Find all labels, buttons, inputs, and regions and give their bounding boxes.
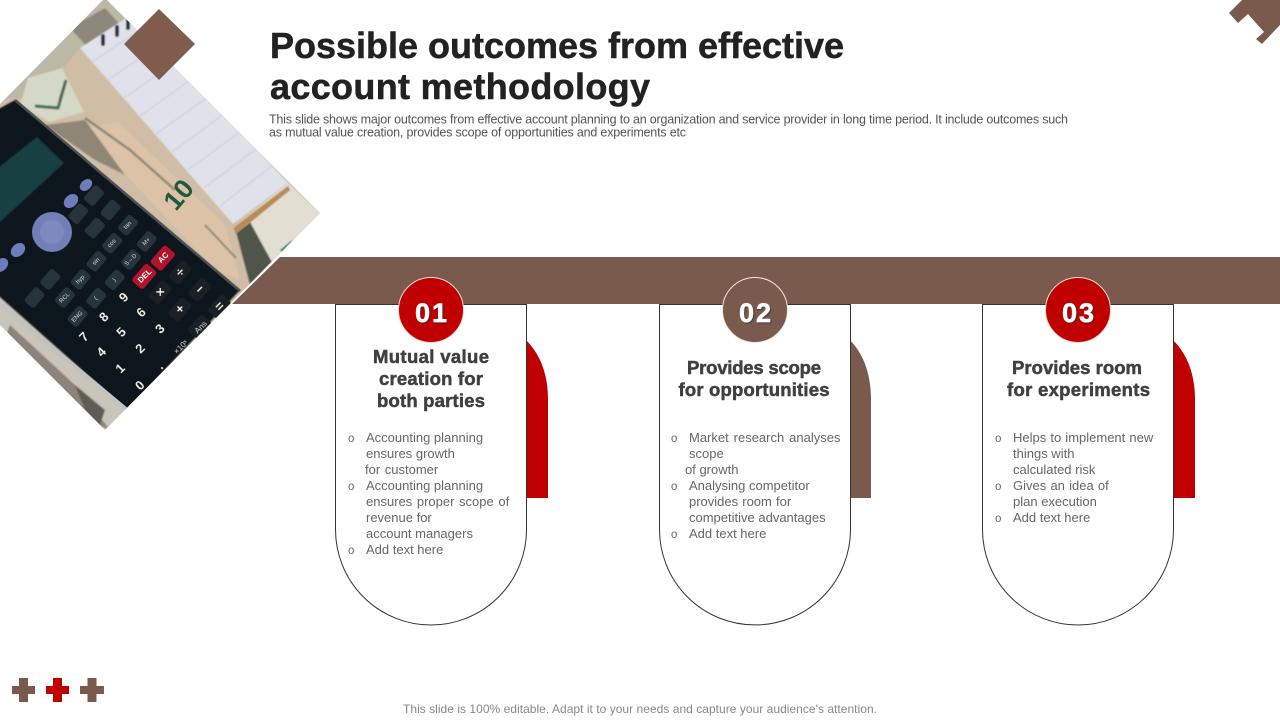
card 3 bullet list: o [995, 481, 1001, 493]
card 2 bullet list: competitive advantages [689, 510, 826, 525]
card 2 body [660, 304, 850, 625]
calculator body [0, 100, 240, 410]
card 1 bullet list: Accounting planning [366, 478, 483, 493]
calculator keys: 9 [116, 289, 131, 305]
card 3 bullet list: things with [1013, 446, 1074, 461]
calculator keys: × [152, 283, 168, 300]
calculator keys: 7 [76, 329, 92, 345]
calculator keys: hyp [75, 274, 87, 286]
card 3 body [982, 304, 1174, 625]
photo: calculator, notepad and banknotes [0, 0, 330, 440]
calculator keys: 3 [152, 321, 168, 336]
calculator keys: ×10ˣ [172, 338, 190, 356]
corner icon [1229, 0, 1280, 44]
banknote denomination: 10 [158, 174, 200, 216]
card 1 bullet list: o [348, 433, 354, 445]
card 2 back tab [850, 340, 871, 498]
calculator keys: 6 [133, 304, 149, 320]
card 1 bullet list: account managers [366, 526, 473, 541]
card 3 bullet list: Gives an idea of [1013, 478, 1109, 493]
card 2 bullet list: Analysing competitor [689, 478, 810, 493]
card 1 bullet list: Accounting planning [366, 430, 483, 445]
card 3 back tab [1173, 340, 1195, 498]
calculator keys: 8 [96, 309, 112, 325]
calculator keys: ) [112, 278, 118, 283]
card 3 number badge: 03 [1062, 298, 1096, 328]
card 2 bullet list: Market research analyses [689, 430, 841, 445]
card 2 number badge: 02 [739, 298, 773, 328]
calculator keys: = [211, 298, 228, 314]
calculator keys: 5 [113, 324, 129, 340]
card 3 bullet list: Add text here [1013, 510, 1090, 525]
calculator keys: sin [92, 257, 101, 267]
calculator keys: 2 [132, 341, 148, 356]
card 3 bullet list: o [995, 513, 1001, 525]
banner stripe [232, 257, 1280, 304]
card 1 bullet list: Add text here [366, 542, 443, 557]
card 1 number badge [398, 278, 464, 342]
calculator keys: + [172, 301, 188, 317]
calculator keys: Ans [193, 319, 209, 335]
card 2 number badge [722, 278, 788, 342]
banknote background [0, 0, 330, 440]
card 2 bullet list: o [671, 529, 677, 541]
card 2 bullet list: o [671, 433, 677, 445]
card 1 bullet list [348, 430, 510, 557]
calculator keys: M+ [142, 237, 152, 247]
card 2 bullet list: o [671, 481, 677, 493]
card 3 bullet list: plan execution [1013, 494, 1097, 509]
card 1 bullet list: o [348, 481, 354, 493]
calculator keys: . [153, 359, 166, 372]
calculator direction pad [32, 212, 72, 252]
notepad [80, 14, 290, 234]
calculator keys: S⇔D [124, 253, 139, 267]
title: Possible outcomes from effective [270, 25, 844, 66]
subtitle description [269, 112, 1068, 140]
card 1 bullet list: ensures growth [366, 446, 455, 461]
calculator keys: 4 [93, 343, 110, 360]
card 1 heading [373, 346, 489, 411]
card 1 bullet list: o [348, 545, 354, 557]
calculator keys: RCL [59, 291, 72, 305]
subtitle description: This slide shows major outcomes from effective account planning to an organization and service provider in long time period. It include outcomes such [269, 112, 1068, 126]
subtitle description: as mutual value creation, provides scope of opportunities and experiments etc [269, 126, 686, 140]
title: account methodology [270, 66, 650, 107]
card 3 heading [1007, 357, 1150, 400]
card 1 heading: creation for [379, 368, 483, 389]
card 2 bullet list: scope [689, 446, 724, 461]
card 3 bullet list: calculated risk [1013, 462, 1096, 477]
card 3 heading: for experiments [1007, 379, 1150, 400]
footer note: This slide is 100% editable. Adapt it to your needs and capture your audience's attention. [403, 702, 877, 716]
panel: mutual value creation [336, 278, 548, 625]
card 1 body [336, 304, 526, 625]
calculator keys: 0 [132, 377, 148, 393]
card 1 back tab [526, 340, 548, 498]
calculator keys: DEL [136, 267, 154, 285]
card 2 bullet list: Add text here [689, 526, 766, 541]
plus icons [12, 678, 104, 702]
card 2 heading [678, 357, 830, 400]
card 3 bullet list [995, 430, 1154, 525]
calculator keys: 1 [112, 360, 128, 376]
title [270, 25, 844, 107]
calculator keys: ENG [71, 310, 85, 324]
calculator keys: ÷ [172, 264, 188, 280]
calculator keys: cos [107, 238, 118, 249]
card 2 heading: Provides scope [687, 357, 821, 378]
panel: room for experiments [982, 278, 1195, 625]
card 2 bullet list [671, 430, 841, 541]
decorative brown diamond [124, 9, 195, 80]
calculator keys: ( [93, 296, 99, 302]
card 1 number badge: 01 [415, 298, 449, 328]
card 2 bullet list: provides room for [689, 494, 792, 509]
calculator keys: AC [156, 250, 171, 265]
card 2 heading: for opportunities [678, 379, 830, 400]
card 1 bullet list: revenue for [366, 510, 432, 525]
card 1 heading: both parties [377, 390, 485, 411]
card 1 bullet list: ensures proper scope of [366, 494, 510, 509]
card 1 heading: Mutual value [373, 346, 489, 367]
calculator keys [24, 186, 231, 390]
card 3 bullet list: Helps to implement new [1013, 430, 1154, 445]
card 3 bullet list: o [995, 433, 1001, 445]
calculator keys: − [192, 281, 208, 297]
panel: scope for opportunities [660, 278, 871, 625]
calculator display [0, 137, 64, 222]
card 3 heading: Provides room [1012, 357, 1142, 378]
card 1 bullet list: for customer [365, 462, 439, 477]
card 3 number badge [1046, 278, 1110, 342]
calculator keys: tan [123, 221, 133, 231]
card 2 bullet list: of growth [685, 462, 738, 477]
calculator blue keys [0, 177, 95, 275]
